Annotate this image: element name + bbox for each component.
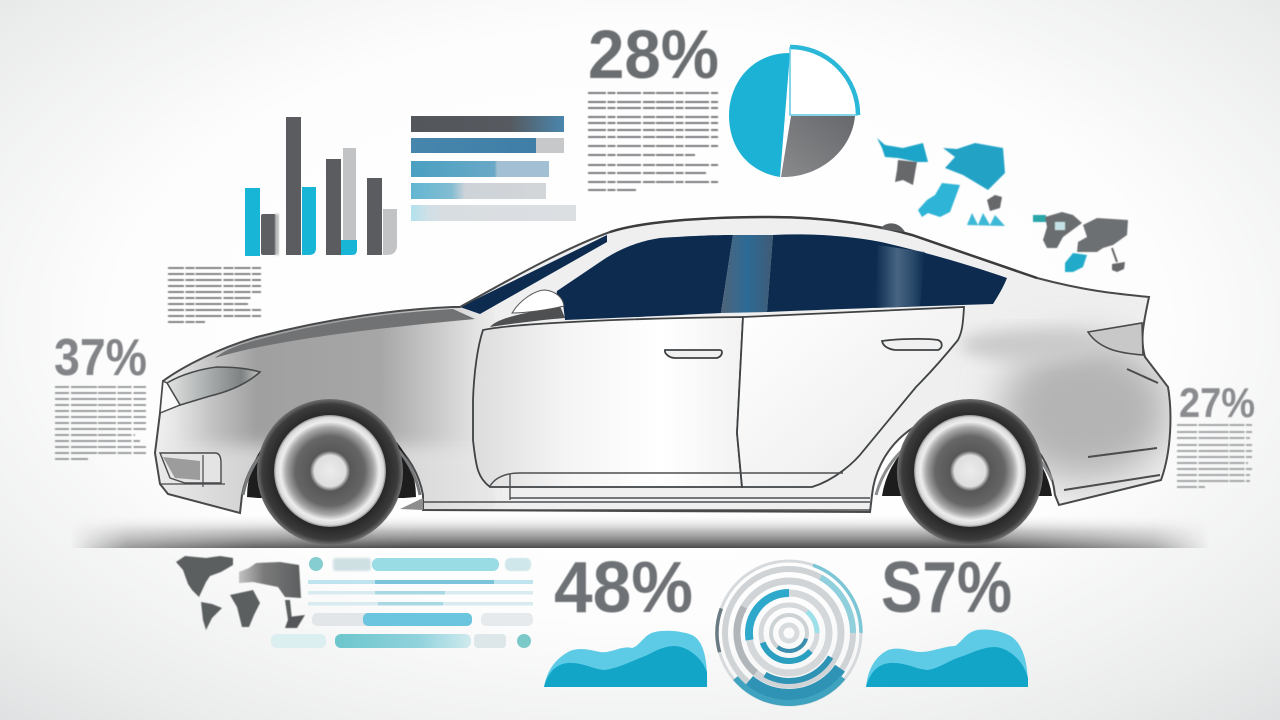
text block under 27 percent (1177, 425, 1252, 487)
heading: 37 percent: 37% (54, 329, 147, 387)
front wheel (257, 399, 403, 545)
pie chart (729, 47, 858, 177)
headlight (160, 367, 260, 413)
text block: upper left (168, 268, 261, 322)
door handle rear (882, 339, 942, 350)
front side window (557, 235, 733, 320)
text block under 37 percent (55, 387, 146, 459)
heading: 27 percent: 27% (1179, 379, 1255, 426)
rear side window (767, 234, 1007, 312)
car (140, 210, 1180, 545)
rear door (737, 307, 964, 487)
progress list (271, 557, 533, 648)
window reflection (875, 245, 925, 308)
bar chart: horizontal bars (411, 116, 576, 221)
window pillar (721, 235, 773, 313)
area chart left (544, 631, 707, 687)
area chart right (866, 629, 1028, 687)
bar chart: vertical bars (245, 117, 397, 256)
rear wheel arch (876, 421, 1052, 496)
body outline (155, 217, 1170, 513)
heading: 48 percent: 48% (554, 548, 693, 628)
text block under 28 percent (588, 93, 718, 190)
scattered map pieces: right group (1033, 212, 1128, 272)
tail light (1088, 323, 1143, 355)
rear wheel (897, 399, 1043, 545)
scattered map pieces: upper group (877, 138, 1005, 226)
ground shadow (75, 520, 1204, 548)
radial ring chart (690, 534, 888, 720)
roof edge (610, 217, 1037, 278)
fog lamp (160, 453, 225, 487)
door sill lines (423, 473, 870, 510)
heading: S7 percent: S7% (881, 548, 1012, 628)
front door (473, 317, 743, 487)
car body (140, 210, 1180, 525)
front wheel arch (243, 410, 423, 510)
side mirror (490, 290, 565, 327)
rear details (1064, 369, 1160, 490)
world map (176, 556, 305, 630)
door handle front (665, 350, 722, 358)
spoiler bump (880, 223, 905, 232)
heading: 28 percent: 28% (588, 16, 719, 93)
windshield strip (460, 235, 607, 314)
